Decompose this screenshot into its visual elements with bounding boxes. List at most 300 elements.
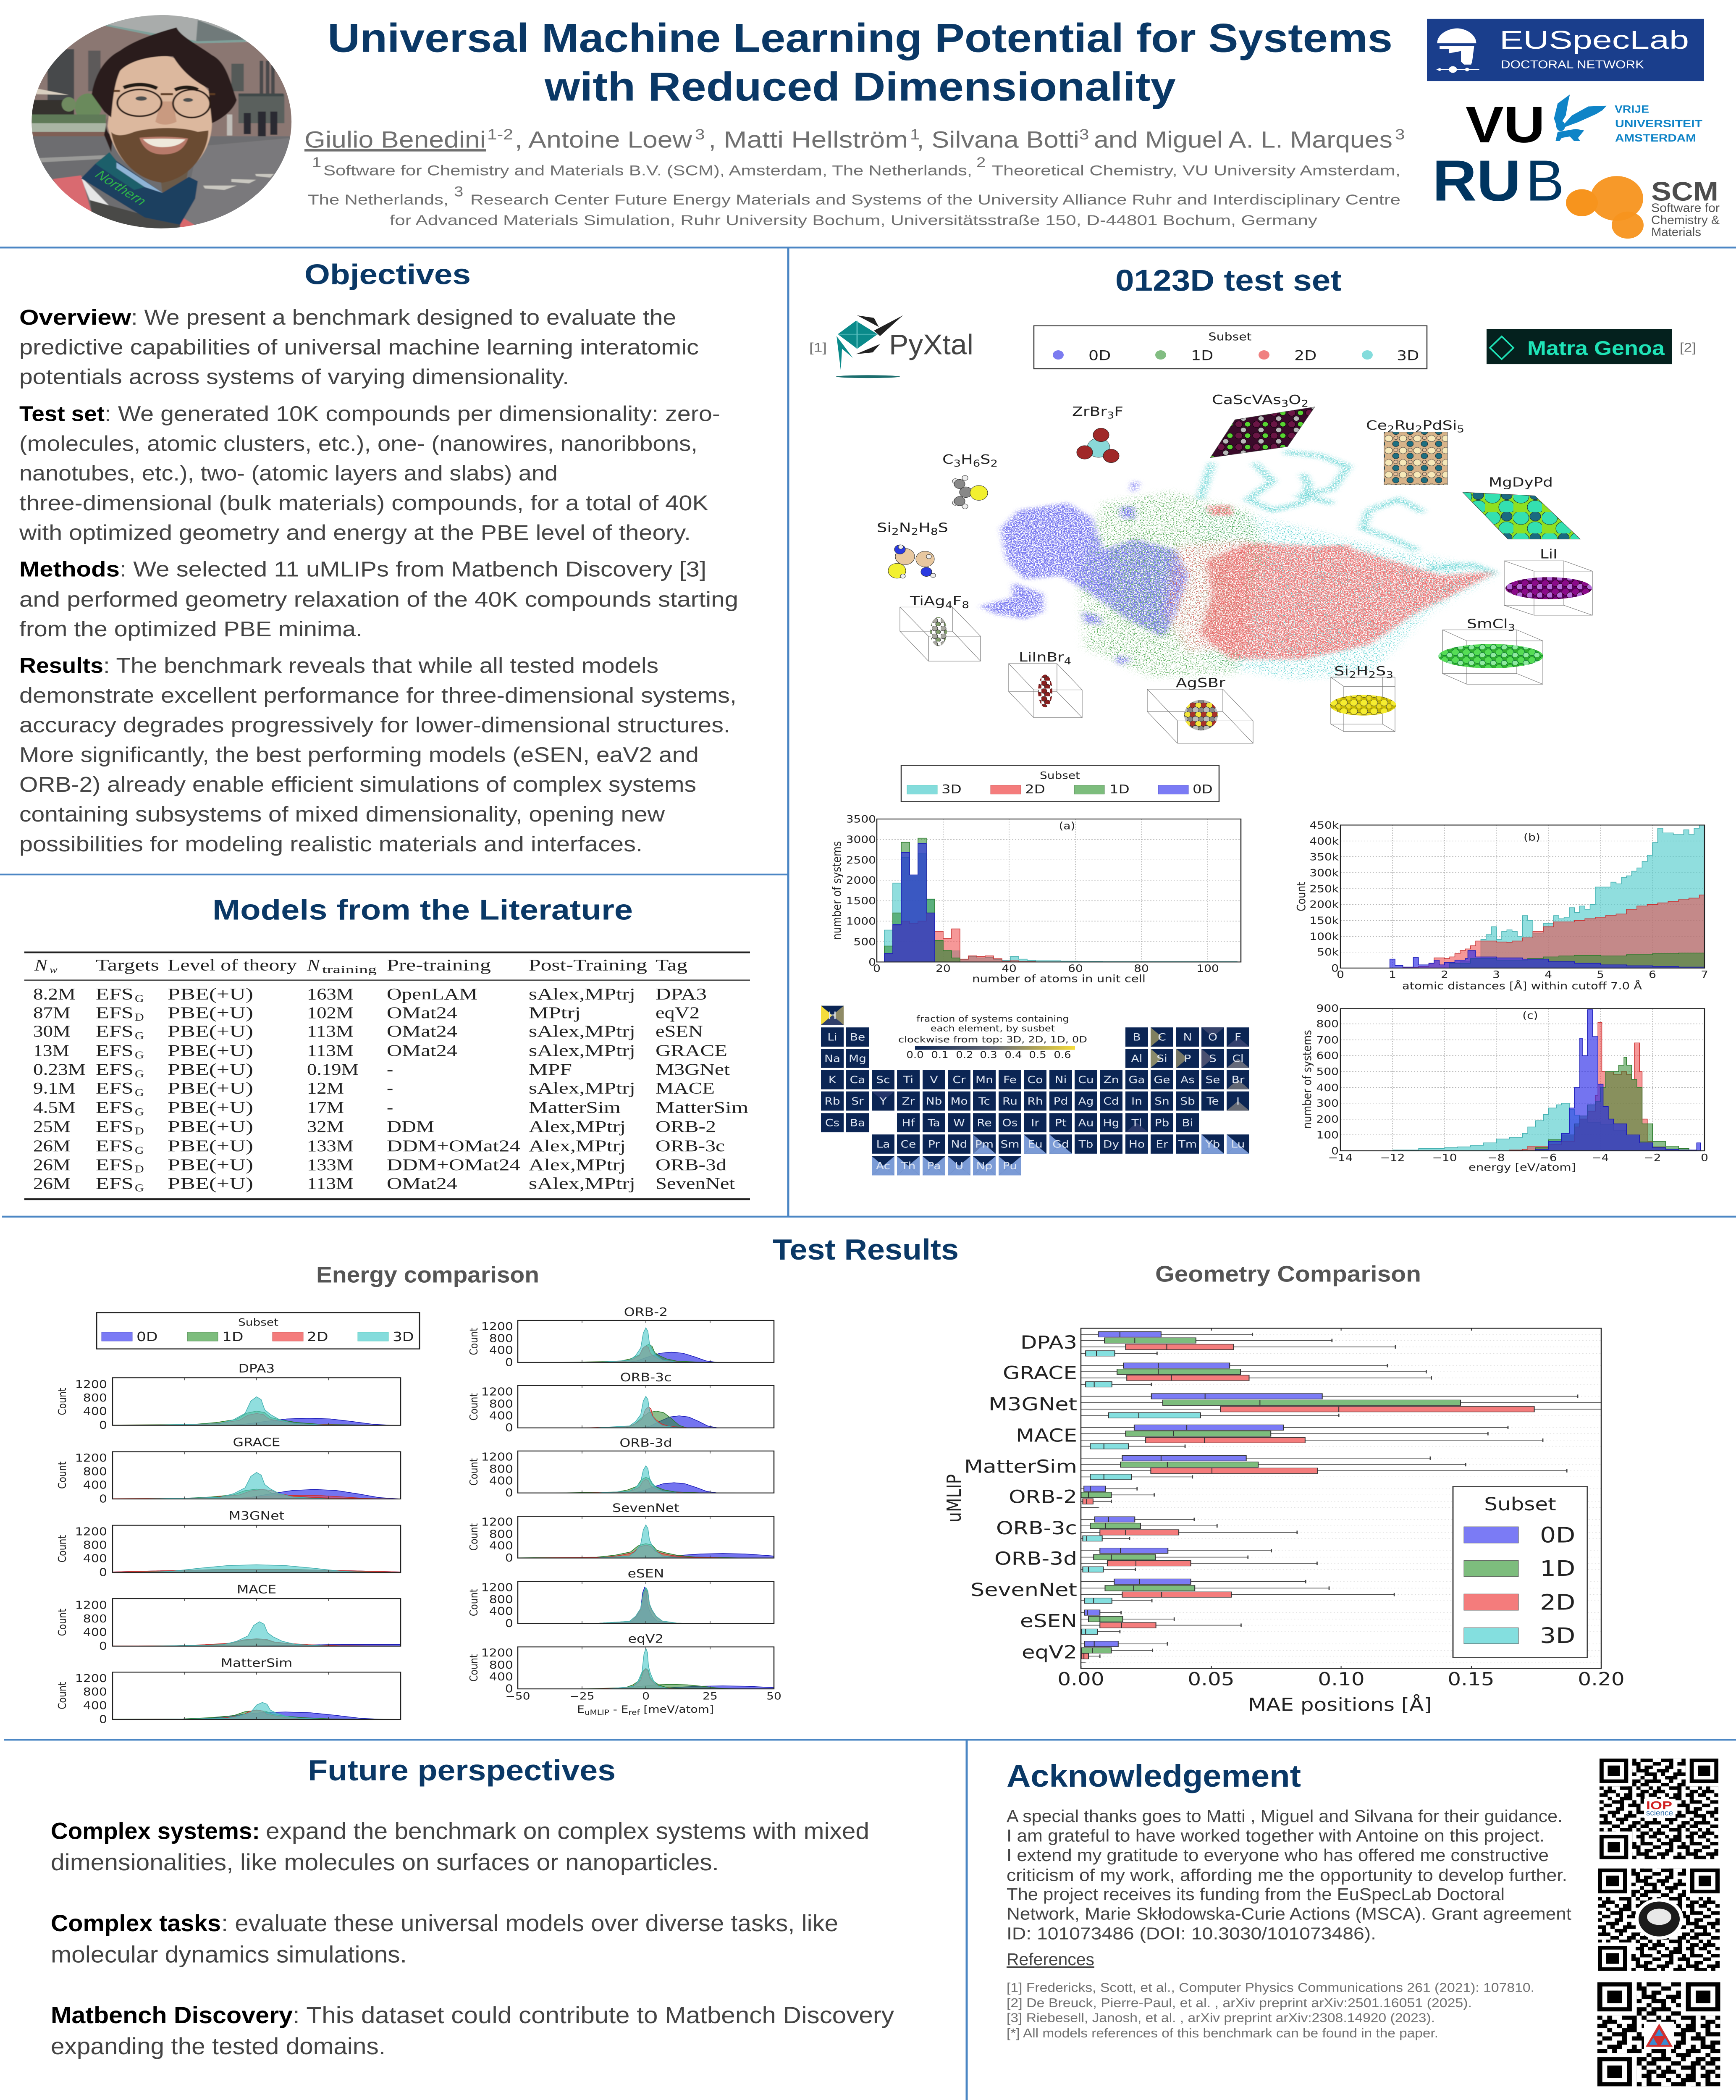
table: body rows: PBE(+U) bbox=[168, 1099, 253, 1117]
logo: SCM: SCM bbox=[1651, 177, 1718, 206]
text: complex tasks bbox=[51, 1910, 838, 1967]
chart (a): atoms in unit cell: 2000 bbox=[846, 875, 876, 887]
chart (b): atomic distances: atomic distances [Å] within cutoff 7.0 Å bbox=[1402, 980, 1642, 992]
authors: , Antoine Loew bbox=[515, 126, 692, 152]
structure: Si2H2S3: 2 bbox=[1368, 670, 1376, 680]
energy histogram: eSEN: 1200 bbox=[481, 1581, 513, 1594]
chart (c): energy per atom: −10 bbox=[1432, 1152, 1457, 1164]
energy histogram: eSEN bbox=[467, 1567, 774, 1630]
chart (b): atomic distances: 0 bbox=[1331, 963, 1339, 974]
text: reference list: [2] De Breuck, Pierre-Paul, et al. , arXiv preprint arXiv:2501.16051 (2025). bbox=[1007, 1996, 1472, 2010]
box plot: geometry comparison: 0.05 bbox=[1188, 1669, 1235, 1690]
chart (a): atoms in unit cell: 3000 bbox=[846, 834, 876, 845]
chart (b): atomic distances: 5 bbox=[1597, 969, 1604, 981]
energy histogram: eqV2: 1200 bbox=[481, 1646, 513, 1659]
table: body rows: M3GNet bbox=[656, 1060, 730, 1079]
periodic table: element fractions: Cu bbox=[1078, 1074, 1094, 1086]
molecule: ZrBr3F bbox=[1072, 404, 1123, 463]
periodic table caption and colorbar: 0.2 bbox=[956, 1050, 973, 1060]
energy histogram: ORB-3c: 800 bbox=[489, 1398, 513, 1410]
logo: VU Amsterdam: VRIJE bbox=[1615, 103, 1649, 115]
energy histogram: GRACE: 1200 bbox=[75, 1452, 107, 1464]
periodic table: element fractions: Pb bbox=[1155, 1118, 1169, 1129]
structure: Si2H2S3: Si bbox=[1334, 664, 1348, 678]
periodic table: element fractions: O bbox=[1208, 1032, 1217, 1043]
box plot: geometry comparison: MatterSim bbox=[964, 1456, 1077, 1477]
text: complex systems bbox=[51, 1818, 869, 1875]
structure: AgSBr bbox=[1147, 675, 1253, 743]
periodic table: element fractions: Tc bbox=[978, 1096, 990, 1107]
table: body rows: 102M bbox=[307, 1004, 354, 1022]
structure: Si2H2S3: H bbox=[1356, 664, 1368, 678]
heading: models: Models from the Literature bbox=[212, 894, 633, 926]
energy histogram: DPA3: 800 bbox=[83, 1391, 107, 1404]
logo: Matra Genoa bbox=[1487, 329, 1696, 364]
structure: Ce2Ru2PdSi5: 2 bbox=[1415, 424, 1422, 435]
energy histogram: MatterSim: 400 bbox=[83, 1699, 107, 1712]
heading: test set: 0123D test set bbox=[1115, 264, 1342, 297]
table: body rows: sAlex,MPtrj bbox=[529, 1079, 635, 1097]
energy histogram: ORB-2: 400 bbox=[489, 1344, 513, 1357]
energy histogram: MatterSim: 1200 bbox=[75, 1672, 107, 1685]
heading: objectives: Objectives bbox=[304, 258, 471, 290]
chart (c): energy per atom: −4 bbox=[1592, 1152, 1609, 1164]
periodic table: element fractions: V bbox=[930, 1074, 938, 1086]
periodic table: element fractions: Au bbox=[1078, 1118, 1094, 1129]
text: overview: potentials across systems of varying dimensionality. bbox=[19, 365, 569, 388]
periodic table: element fractions: Sc bbox=[876, 1074, 890, 1086]
affiliations: 1 bbox=[312, 154, 321, 170]
text: results: demonstrate excellent performance for three-dimensional systems, bbox=[19, 683, 737, 707]
periodic table: element fractions: In bbox=[1131, 1096, 1142, 1107]
periodic table: element fractions: U bbox=[955, 1160, 963, 1172]
periodic table caption and colorbar: 0.5 bbox=[1029, 1050, 1046, 1060]
affiliations: 2 bbox=[976, 154, 986, 170]
legend: scatter subset: 0D bbox=[1088, 348, 1111, 364]
box plot: geometry comparison: 0.20 bbox=[1578, 1669, 1625, 1690]
QR code: triangle logo bbox=[1592, 1978, 1725, 2090]
energy histogram: eqV2: 25 bbox=[703, 1691, 718, 1702]
table: body rows: 8.2M bbox=[33, 985, 76, 1003]
chart (a): atoms in unit cell bbox=[830, 814, 1241, 985]
text: results: : The benchmark reveals that while all tested models bbox=[103, 654, 658, 677]
periodic table: element fractions: Np bbox=[976, 1160, 992, 1172]
structure: AgSBr: AgSBr bbox=[1176, 675, 1225, 690]
text: test set: nanotubes, etc.), two- (atomic layers and slabs) and bbox=[19, 461, 558, 485]
logo: SCM bbox=[1566, 176, 1720, 239]
legend: geometry subset bbox=[1453, 1486, 1587, 1658]
table: body rows: 17M bbox=[307, 1099, 344, 1117]
energy histogram: eqV2: eqV2 bbox=[628, 1632, 663, 1646]
periodic table: element fractions: Rh bbox=[1027, 1096, 1043, 1107]
structure: LiI: LiI bbox=[1540, 546, 1558, 562]
table: body rows: 26M bbox=[33, 1156, 71, 1174]
table: body rows: OMat24 bbox=[387, 1004, 457, 1022]
energy histogram: SevenNet bbox=[467, 1502, 812, 1564]
legend: energy subset: 0D bbox=[136, 1329, 158, 1344]
periodic table: element fractions: Ga bbox=[1129, 1074, 1145, 1086]
periodic table: element fractions: Zn bbox=[1104, 1074, 1119, 1086]
periodic table: element fractions: Pd bbox=[1054, 1096, 1068, 1107]
periodic table: element fractions: Tm bbox=[1178, 1139, 1197, 1150]
energy histogram: ORB-3d: 1200 bbox=[481, 1451, 513, 1463]
chart (a): atoms in unit cell: 1000 bbox=[846, 916, 876, 927]
structure: Ce2Ru2PdSi5: 5 bbox=[1457, 424, 1464, 435]
periodic table: element fractions: Tb bbox=[1078, 1139, 1093, 1150]
chart (b): atomic distances: 200k bbox=[1309, 899, 1339, 911]
table: body rows: G bbox=[135, 1106, 144, 1118]
table: body rows: ORB-2 bbox=[656, 1118, 716, 1136]
text: complex tasks: Complex tasks bbox=[51, 1910, 221, 1936]
periodic table: element fractions: Sr bbox=[851, 1096, 864, 1107]
table: body rows: sAlex,MPtrj bbox=[529, 1042, 635, 1060]
text: test set: Test set bbox=[19, 402, 105, 426]
molecule: Si2N2H8S: Si bbox=[877, 520, 891, 535]
periodic table: element fractions: Cd bbox=[1103, 1096, 1119, 1107]
periodic table: element fractions: Fe bbox=[1003, 1074, 1017, 1086]
energy histogram: GRACE: GRACE bbox=[233, 1436, 281, 1449]
chart (b): atomic distances: 2 bbox=[1441, 969, 1448, 981]
table: body rows: Alex,MPtrj bbox=[529, 1118, 626, 1136]
energy histogram: eqV2: 400 bbox=[489, 1670, 513, 1683]
chart (b): atomic distances: 150k bbox=[1309, 915, 1339, 927]
table: body rows: PBE(+U) bbox=[168, 1022, 253, 1040]
logo: EUSpecLab: EUSpecLab bbox=[1500, 26, 1689, 55]
text: methods: Methods bbox=[19, 557, 120, 581]
table: body rows: G bbox=[135, 1049, 144, 1061]
authors: , Silvana Botti bbox=[917, 126, 1079, 152]
energy histogram: ORB-2: 800 bbox=[489, 1332, 513, 1345]
logo: RUB: RU bbox=[1432, 148, 1521, 213]
QR code: IOP science: science bbox=[1646, 1809, 1673, 1817]
periodic table caption and colorbar: each element, by susbet bbox=[931, 1024, 1055, 1034]
chart (c): energy per atom: 0 bbox=[1331, 1145, 1339, 1157]
energy histogram: DPA3 bbox=[55, 1362, 458, 1432]
table: header row: training bbox=[322, 964, 377, 976]
chart (c): energy per atom: −12 bbox=[1380, 1152, 1405, 1164]
chart (a): atoms in unit cell: number of atoms in unit cell bbox=[972, 974, 1146, 985]
energy histogram: SevenNet: 800 bbox=[489, 1528, 513, 1541]
chart (b): atomic distances: 0 bbox=[1337, 969, 1344, 981]
text: results: Results bbox=[19, 654, 103, 677]
periodic table: element fractions: Rb bbox=[824, 1096, 840, 1107]
heading: references: References bbox=[1007, 1950, 1094, 1969]
structure: Ce2Ru2PdSi5: PdSi bbox=[1422, 418, 1457, 433]
box plot: geometry comparison: 0.15 bbox=[1448, 1669, 1495, 1690]
text: methods: : We selected 11 uMLIPs from Matbench Discovery [3] bbox=[120, 557, 706, 581]
periodic table caption and colorbar: 0.3 bbox=[980, 1050, 997, 1060]
box plot: geometry comparison: ORB-3d bbox=[994, 1548, 1077, 1569]
table: body rows: DDM+OMat24 bbox=[387, 1156, 520, 1174]
table: body rows: 32M bbox=[307, 1118, 344, 1136]
periodic table: element fractions: Mn bbox=[976, 1074, 993, 1086]
periodic table: element fractions: Pr bbox=[928, 1139, 940, 1150]
text: test set bbox=[19, 402, 720, 544]
structure: Ce2Ru2PdSi5: Ce bbox=[1366, 418, 1386, 433]
molecule: C3H6S2: 3 bbox=[954, 458, 961, 469]
molecule: C3H6S2: C bbox=[942, 452, 953, 467]
text: acknowledgement body: I extend my gratitude to everyone who has offered me constructive bbox=[1007, 1846, 1549, 1865]
logo: RUB: B bbox=[1526, 148, 1564, 213]
box plot: geometry comparison bbox=[943, 1328, 1625, 1715]
structure: MgDyPd: MgDyPd bbox=[1489, 475, 1553, 490]
periodic table: element fractions: Br bbox=[1232, 1074, 1245, 1086]
periodic table: element fractions: Ni bbox=[1055, 1074, 1067, 1086]
text: overview: predictive capabilities of universal machine learning interatomic bbox=[19, 336, 699, 359]
QR code: IOP science: IOP bbox=[1646, 1799, 1672, 1812]
periodic table: element fractions: W bbox=[953, 1118, 965, 1129]
chart (b): atomic distances: 400k bbox=[1309, 836, 1339, 847]
legend: histogram subset: 3D bbox=[941, 782, 962, 796]
chart (b): atomic distances: 3 bbox=[1492, 969, 1500, 981]
chart (c): energy per atom: −8 bbox=[1487, 1152, 1505, 1164]
affiliations: Theoretical Chemistry, VU University Amsterdam, bbox=[992, 163, 1400, 179]
table: body rows: EFS bbox=[96, 1022, 134, 1040]
table: body rows: ORB-3c bbox=[656, 1137, 725, 1155]
table: body rows: PBE(+U) bbox=[168, 1004, 253, 1022]
text: overview bbox=[19, 305, 699, 388]
periodic table: element fractions: B bbox=[1133, 1032, 1141, 1043]
periodic table: element fractions: Ho bbox=[1129, 1139, 1145, 1150]
periodic table: element fractions: Al bbox=[1131, 1053, 1142, 1065]
table: body rows: 87M bbox=[33, 1004, 71, 1022]
text: results: ORB-2) already enable efficient simulations of complex systems bbox=[19, 772, 696, 796]
table: body rows: ORB-3d bbox=[656, 1156, 726, 1174]
text: complex systems: dimensionalities, like molecules on surfaces or nanoparticles. bbox=[51, 1849, 719, 1875]
energy histogram: eSEN: 0 bbox=[505, 1617, 513, 1630]
energy histogram: MatterSim bbox=[26, 1656, 487, 1726]
table: body rows: GRACE bbox=[656, 1042, 727, 1060]
molecule: ZrBr3F: 3 bbox=[1107, 410, 1114, 421]
text: reference list: [*] All models references of this benchmark can be found in the paper. bbox=[1007, 2026, 1438, 2040]
table: body rows: SevenNet bbox=[656, 1175, 735, 1193]
QR code: IOP science bbox=[1595, 1755, 1723, 1863]
energy histogram: SevenNet: SevenNet bbox=[612, 1502, 679, 1515]
logo: PyXtal: PyXtal bbox=[889, 328, 973, 360]
chart (c): energy per atom: −14 bbox=[1328, 1152, 1353, 1164]
chart (a): atoms in unit cell: 1500 bbox=[846, 895, 876, 907]
periodic table: element fractions: Eu bbox=[1028, 1139, 1043, 1150]
chart (b): atomic distances: 50k bbox=[1317, 947, 1339, 958]
legend: energy subset: 1D bbox=[222, 1329, 244, 1344]
panel: test results bbox=[0, 1234, 1625, 1726]
periodic table: element fractions: Os bbox=[1002, 1118, 1017, 1129]
legend: energy subset bbox=[97, 1312, 420, 1349]
energy histogram: MatterSim: 800 bbox=[83, 1685, 107, 1698]
heading: test results: Test Results bbox=[773, 1234, 959, 1266]
energy histogram: MACE: Count bbox=[56, 1609, 68, 1636]
table: body rows: sAlex,MPtrj bbox=[529, 985, 635, 1003]
text: acknowledgement body: The project receives its funding from the EuSpecLab Doctoral bbox=[1007, 1885, 1505, 1904]
text: results: accuracy degrades progressively for lower-dimensional structures. bbox=[19, 713, 730, 737]
structure: Si2H2S3 bbox=[1330, 664, 1396, 732]
molecule: Si2N2H8S: 2 bbox=[911, 526, 918, 537]
panel: acknowledgement bbox=[1007, 1755, 1725, 2090]
table: body rows: 133M bbox=[307, 1156, 354, 1174]
energy histogram: eqV2: 0 bbox=[505, 1683, 513, 1695]
energy histogram: eqV2: 800 bbox=[489, 1659, 513, 1671]
table: body rows: OpenLAM bbox=[387, 985, 477, 1003]
chart (b): atomic distances: Count bbox=[1295, 882, 1309, 911]
text: complex tasks: : evaluate these universal models over diverse tasks, like bbox=[221, 1910, 838, 1936]
legend: geometry subset: Subset bbox=[1484, 1494, 1556, 1515]
periodic table: element fractions: Re bbox=[977, 1118, 992, 1129]
energy histogram: ORB-2: ORB-2 bbox=[624, 1305, 668, 1319]
chart (b): atomic distances: 100k bbox=[1309, 931, 1339, 942]
table: body rows: G bbox=[135, 1030, 144, 1042]
panel: models from the literature bbox=[24, 894, 750, 1199]
table: body rows: 0.19M bbox=[307, 1060, 359, 1079]
energy histogram: SevenNet: Count bbox=[467, 1523, 480, 1551]
energy histogram: ORB-3c bbox=[467, 1371, 774, 1434]
periodic table: element fractions: I bbox=[1236, 1096, 1240, 1107]
periodic table: element fractions: Sm bbox=[1000, 1139, 1020, 1150]
energy histogram: eqV2: ref bbox=[628, 1709, 640, 1717]
energy histogram: eSEN: eSEN bbox=[628, 1567, 664, 1580]
chart (b): atomic distances: 6 bbox=[1649, 969, 1656, 981]
energy histogram: eqV2: [meV/atom] bbox=[640, 1704, 714, 1715]
periodic table: element fractions: Ge bbox=[1154, 1074, 1170, 1086]
periodic table: element fractions: Pu bbox=[1003, 1160, 1017, 1172]
energy histogram: MACE bbox=[0, 1583, 545, 1652]
table: body rows: 133M bbox=[307, 1137, 354, 1155]
authors: and Miguel A. L. Marques bbox=[1094, 126, 1392, 152]
energy histogram: M3GNet: 0 bbox=[99, 1566, 107, 1579]
periodic table: element fractions: Ac bbox=[876, 1160, 890, 1172]
text: matbench discovery: : This dataset could contribute to Matbench Discovery bbox=[293, 2002, 894, 2028]
energy histogram: ORB-3c: ORB-3c bbox=[620, 1371, 671, 1384]
table: header row: Tag bbox=[656, 956, 687, 974]
box plot: geometry comparison: SevenNet bbox=[970, 1580, 1077, 1600]
energy histogram: ORB-3c: 1200 bbox=[481, 1386, 513, 1398]
legend: histogram subset bbox=[901, 765, 1219, 802]
table: body rows: OMat24 bbox=[387, 1022, 457, 1040]
periodic table: element fractions: Er bbox=[1156, 1139, 1168, 1150]
table: body rows: G bbox=[135, 1087, 144, 1099]
chart (b): atomic distances bbox=[1295, 820, 1708, 992]
affiliations: The Netherlands, bbox=[308, 192, 448, 208]
energy histogram: eqV2: −25 bbox=[569, 1691, 595, 1702]
legend: geometry subset: 1D bbox=[1540, 1556, 1575, 1581]
table: body rows: EFS bbox=[96, 1137, 134, 1155]
text: test set: three-dimensional (bulk materials) compounds, for a total of 40K bbox=[19, 491, 708, 515]
energy histogram: ORB-3d: ORB-3d bbox=[619, 1436, 672, 1450]
chart (c): energy per atom: −2 bbox=[1644, 1152, 1661, 1164]
legend: histogram subset: 0D bbox=[1193, 782, 1213, 796]
table: body rows: PBE(+U) bbox=[168, 1156, 253, 1174]
panel: 0123D test set bbox=[809, 264, 1708, 1175]
table: body rows: MatterSim bbox=[656, 1099, 748, 1117]
molecule: C3H6S2: 2 bbox=[990, 458, 998, 469]
chart (c): energy per atom bbox=[1301, 1003, 1708, 1173]
table: body rows: - bbox=[387, 1079, 393, 1097]
energy histogram: eqV2: uMLIP bbox=[585, 1709, 609, 1717]
authors: , Matti Hellström bbox=[708, 126, 908, 152]
text: complex systems: Complex systems: bbox=[51, 1818, 260, 1844]
periodic table: element fractions: Mg bbox=[849, 1053, 866, 1065]
table bbox=[24, 953, 750, 1199]
energy histogram: MACE: 800 bbox=[83, 1612, 107, 1625]
affiliations: Research Center Future Energy Materials and Systems of the University Alliance Ruhr and Interdisciplinary Centre bbox=[470, 192, 1400, 208]
text: complex systems: expand the benchmark on complex systems with mixed bbox=[266, 1818, 869, 1844]
energy histogram: DPA3: 1200 bbox=[75, 1378, 107, 1391]
table: body rows: sAlex,MPtrj bbox=[529, 1175, 635, 1193]
table: body rows: 4.5M bbox=[33, 1099, 76, 1117]
periodic table: element fractions: Cl bbox=[1232, 1053, 1244, 1065]
text: reference list: [3] Riebesell, Janosh, et al. , arXiv preprint arXiv:2308.14920 (2023). bbox=[1007, 2011, 1435, 2025]
header bbox=[30, 13, 1720, 239]
chart (b): atomic distances: 7 bbox=[1701, 969, 1708, 981]
chart (c): energy per atom: 200 bbox=[1316, 1114, 1339, 1126]
energy histogram: GRACE: Count bbox=[56, 1462, 68, 1489]
logo: SCM: Materials bbox=[1651, 225, 1701, 239]
energy histogram: eSEN: 400 bbox=[489, 1605, 513, 1617]
portrait photo: Northern bbox=[92, 168, 149, 208]
periodic table: element fractions: Te bbox=[1206, 1096, 1219, 1107]
text: reference list: [1] Fredericks, Scott, et al., Computer Physics Communications 261 (2021): 107810. bbox=[1007, 1981, 1534, 1995]
structure: CaScVAs3O2: CaScVAs bbox=[1212, 392, 1277, 407]
text: reference list bbox=[1007, 1981, 1534, 2040]
periodic table: element fractions: Co bbox=[1028, 1074, 1043, 1086]
structure: MgDyPd bbox=[1463, 475, 1580, 539]
title: with Reduced Dimensionality bbox=[544, 64, 1176, 110]
energy histogram: SevenNet: 1200 bbox=[481, 1516, 513, 1528]
periodic table: element fractions: Hg bbox=[1103, 1118, 1119, 1129]
periodic table: element fractions: Ag bbox=[1078, 1096, 1094, 1107]
table: body rows: 113M bbox=[307, 1042, 354, 1060]
authors: 3 bbox=[1079, 126, 1089, 143]
table: header row: N bbox=[34, 956, 48, 974]
table: body rows: 113M bbox=[307, 1022, 354, 1040]
text: overview: Overview bbox=[19, 305, 131, 329]
logo: PyXtal: [1] bbox=[809, 341, 827, 355]
energy histogram: GRACE: 800 bbox=[83, 1465, 107, 1478]
table: header row: Post-Training bbox=[529, 956, 647, 974]
periodic table: element fractions: Gd bbox=[1052, 1139, 1069, 1150]
logo: SCM: Software for bbox=[1651, 201, 1720, 215]
heading: acknowledgement: Acknowledgement bbox=[1007, 1759, 1301, 1793]
box plot: geometry comparison: MACE bbox=[1016, 1425, 1077, 1446]
molecule: C3H6S2: S bbox=[980, 452, 990, 467]
structure: LiInBr4 bbox=[1009, 650, 1082, 718]
periodic table: element fractions: Pa bbox=[927, 1160, 941, 1172]
chart (c): energy per atom: 300 bbox=[1316, 1098, 1339, 1109]
periodic table caption and colorbar: 0.4 bbox=[1004, 1050, 1022, 1060]
text: acknowledgement body bbox=[1007, 1807, 1572, 1943]
text: matbench discovery bbox=[51, 2002, 894, 2059]
periodic table caption and colorbar: 0.6 bbox=[1054, 1050, 1071, 1060]
table: body rows: 12M bbox=[307, 1079, 344, 1097]
table: body rows: PBE(+U) bbox=[168, 1175, 253, 1193]
energy histogram: ORB-3d bbox=[467, 1436, 774, 1499]
text: test set: (molecules, atomic clusters, etc.), one- (nanowires, nanoribbons, bbox=[19, 432, 698, 456]
chart (c): energy per atom: 800 bbox=[1316, 1018, 1339, 1030]
logo: SCM: Chemistry & bbox=[1651, 213, 1720, 227]
logo: Matra Genoa: Matra Genoa bbox=[1527, 337, 1665, 359]
QR code: GitHub bbox=[1594, 1865, 1724, 1974]
text: methods: from the optimized PBE minima. bbox=[19, 617, 362, 641]
periodic table: element fractions: Nb bbox=[926, 1096, 942, 1107]
table: body rows: PBE(+U) bbox=[168, 1118, 253, 1136]
table: body rows: Alex,MPtrj bbox=[529, 1156, 626, 1174]
periodic table: element fractions: P bbox=[1184, 1053, 1191, 1065]
legend: geometry subset: 0D bbox=[1540, 1523, 1575, 1548]
periodic table: element fractions: N bbox=[1183, 1032, 1192, 1043]
periodic table caption and colorbar: 0.0 bbox=[906, 1050, 924, 1060]
table: body rows: 30M bbox=[33, 1022, 71, 1040]
energy histogram: ORB-3d: 0 bbox=[505, 1486, 513, 1499]
structure: CaScVAs3O2: O bbox=[1288, 392, 1301, 407]
